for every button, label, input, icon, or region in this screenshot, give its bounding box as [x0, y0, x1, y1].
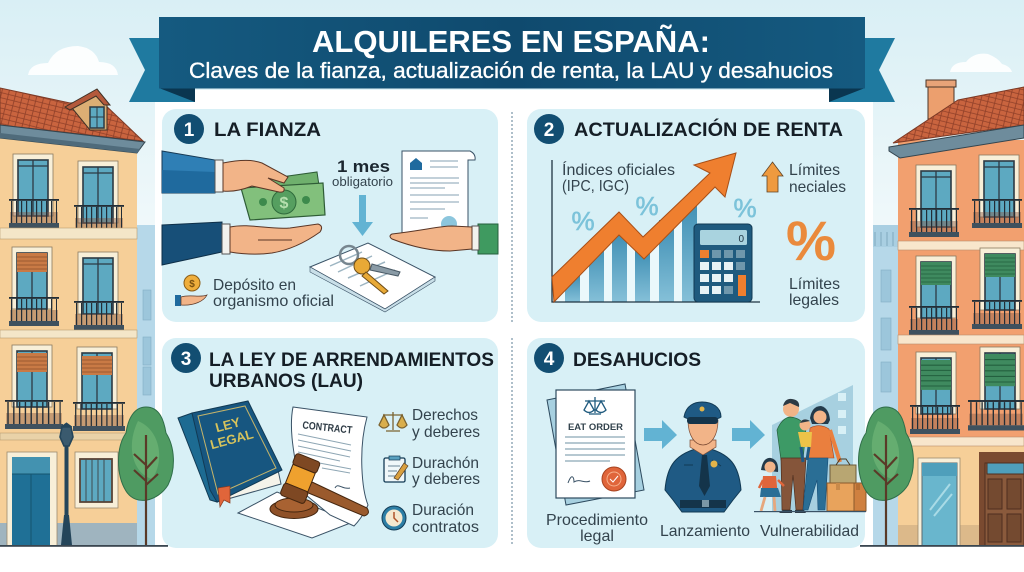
indices label: (IPC, IGC)	[562, 178, 629, 195]
ground window	[75, 452, 118, 508]
left building	[0, 88, 145, 546]
derechos text: Derechos	[412, 407, 478, 424]
1 mes label	[332, 157, 393, 189]
father	[777, 399, 806, 513]
percent signs: %	[635, 191, 659, 221]
right neighbouring building	[873, 225, 898, 546]
duracion text: y deberes	[412, 471, 480, 488]
window row 3	[916, 352, 956, 414]
law book: LEY	[214, 414, 242, 435]
stone base	[0, 523, 137, 546]
chimney	[926, 80, 956, 119]
indices label: Índices oficiales	[562, 160, 675, 179]
stone base	[898, 525, 1024, 546]
panel 2: actualizacion de renta	[527, 109, 865, 322]
glass door	[918, 458, 960, 546]
banner body	[159, 17, 865, 88]
street lamp	[60, 423, 73, 545]
procedimiento label	[546, 512, 648, 545]
panel 3: LAU	[162, 338, 498, 548]
white central panel	[155, 90, 873, 572]
number badge 3: 3	[181, 349, 191, 370]
boxes and bag	[827, 459, 866, 511]
number badge 1	[174, 114, 204, 144]
window row 1	[916, 165, 956, 227]
door	[7, 452, 57, 546]
number badge 4: 4	[544, 349, 555, 370]
roof	[0, 88, 143, 141]
mother	[803, 406, 840, 510]
contratos text: Duración	[412, 502, 474, 519]
rental document	[402, 151, 475, 235]
sky background	[0, 0, 1024, 400]
panel 4: desahucios	[527, 338, 866, 548]
bar chart	[552, 160, 760, 302]
1 mes label: 1 mes	[337, 157, 390, 176]
percent signs: %	[571, 206, 595, 236]
duracion text	[412, 455, 480, 488]
procedimiento label: Procedimiento	[546, 512, 648, 529]
heading: URBANOS (LAU)	[209, 371, 363, 392]
arrow 1	[644, 420, 677, 449]
heading: LA FIANZA	[214, 120, 321, 141]
banknotes	[241, 172, 325, 220]
gavel	[270, 453, 368, 518]
window row 1	[13, 154, 53, 216]
calculator	[694, 224, 752, 302]
limites legales: Límites	[789, 276, 840, 293]
limites legales: legales	[789, 292, 839, 309]
vulnerabilidad label: Vulnerabilidad	[760, 523, 859, 540]
arrow 2	[732, 420, 765, 449]
building silhouette	[772, 385, 853, 512]
number badge 3	[171, 343, 201, 373]
coin and hand icon: $	[189, 279, 195, 290]
deposit text: Depósito en	[213, 277, 296, 294]
heading: ACTUALIZACIÓN DE RENTA	[574, 119, 843, 141]
clipboard icon	[384, 456, 408, 482]
window row 2	[12, 247, 52, 309]
eviction order document: EAT ORDER	[568, 422, 623, 433]
police officer	[665, 402, 741, 512]
coin and hand icon	[175, 275, 207, 306]
calculator: 0	[738, 234, 744, 245]
eviction order document	[547, 384, 644, 505]
tree left	[118, 407, 173, 545]
derechos text	[412, 407, 480, 441]
percent signs: %	[733, 193, 757, 223]
heading: LA LEY DE ARRENDAMIENTOS	[209, 350, 494, 371]
receiving hand	[162, 222, 322, 265]
deposit text	[213, 277, 334, 310]
up arrow	[762, 162, 783, 192]
limites neciales	[789, 162, 846, 196]
girl	[759, 458, 784, 511]
brown door	[979, 452, 1024, 546]
contract document: CONTRACT	[302, 419, 353, 437]
duracion text: Durachón	[412, 455, 479, 472]
procedimiento label: legal	[580, 528, 614, 545]
clock icon	[382, 506, 406, 530]
subtitle: Claves de la fianza, actualización de renta, la LAU y desahucios	[189, 58, 833, 83]
number badge 4	[534, 343, 564, 373]
family	[754, 399, 866, 513]
1 mes label: obligatorio	[332, 174, 393, 189]
contratos text	[412, 502, 479, 536]
banknotes: $	[280, 195, 289, 212]
heading	[209, 350, 494, 392]
cloud left	[28, 46, 118, 75]
lanzamiento label: Lanzamiento	[660, 523, 750, 540]
scale icon	[379, 412, 407, 431]
law book: LEGAL	[208, 426, 255, 452]
limites neciales: Límites	[789, 162, 840, 179]
law book	[178, 401, 282, 507]
tree right	[858, 407, 913, 545]
limites legales	[789, 276, 840, 309]
heading: DESAHUCIOS	[573, 350, 701, 371]
left ribbon tail	[129, 38, 159, 102]
percent signs	[571, 191, 757, 236]
right ribbon tail	[865, 38, 895, 102]
right building	[889, 80, 1024, 546]
number badge 2	[534, 114, 564, 144]
limites neciales: neciales	[789, 179, 846, 196]
contract document	[291, 407, 368, 526]
title: ALQUILERES EN ESPAÑA:	[312, 24, 710, 59]
toddler	[798, 419, 812, 462]
left neighbouring building	[137, 225, 155, 546]
indices label	[562, 160, 675, 195]
number badge 2: 2	[544, 120, 554, 141]
keys on contract	[310, 243, 435, 312]
window row 2	[916, 256, 956, 318]
window row 3	[12, 345, 52, 407]
roof	[893, 87, 1024, 143]
number badge 1: 1	[184, 120, 195, 141]
big percent: %	[786, 209, 836, 272]
cloud right	[950, 54, 1012, 72]
dormer	[65, 89, 110, 130]
derechos text: y deberes	[412, 424, 480, 441]
sheet under gavel	[238, 492, 353, 538]
right hand and sleeve	[390, 224, 498, 254]
panel 1: la fianza	[162, 109, 498, 322]
contratos text: contratos	[412, 519, 479, 536]
banner	[129, 17, 895, 102]
deposit text: organismo oficial	[213, 293, 334, 310]
arrow down	[352, 195, 373, 236]
giving hand	[162, 151, 288, 193]
rising arrow	[552, 153, 736, 302]
